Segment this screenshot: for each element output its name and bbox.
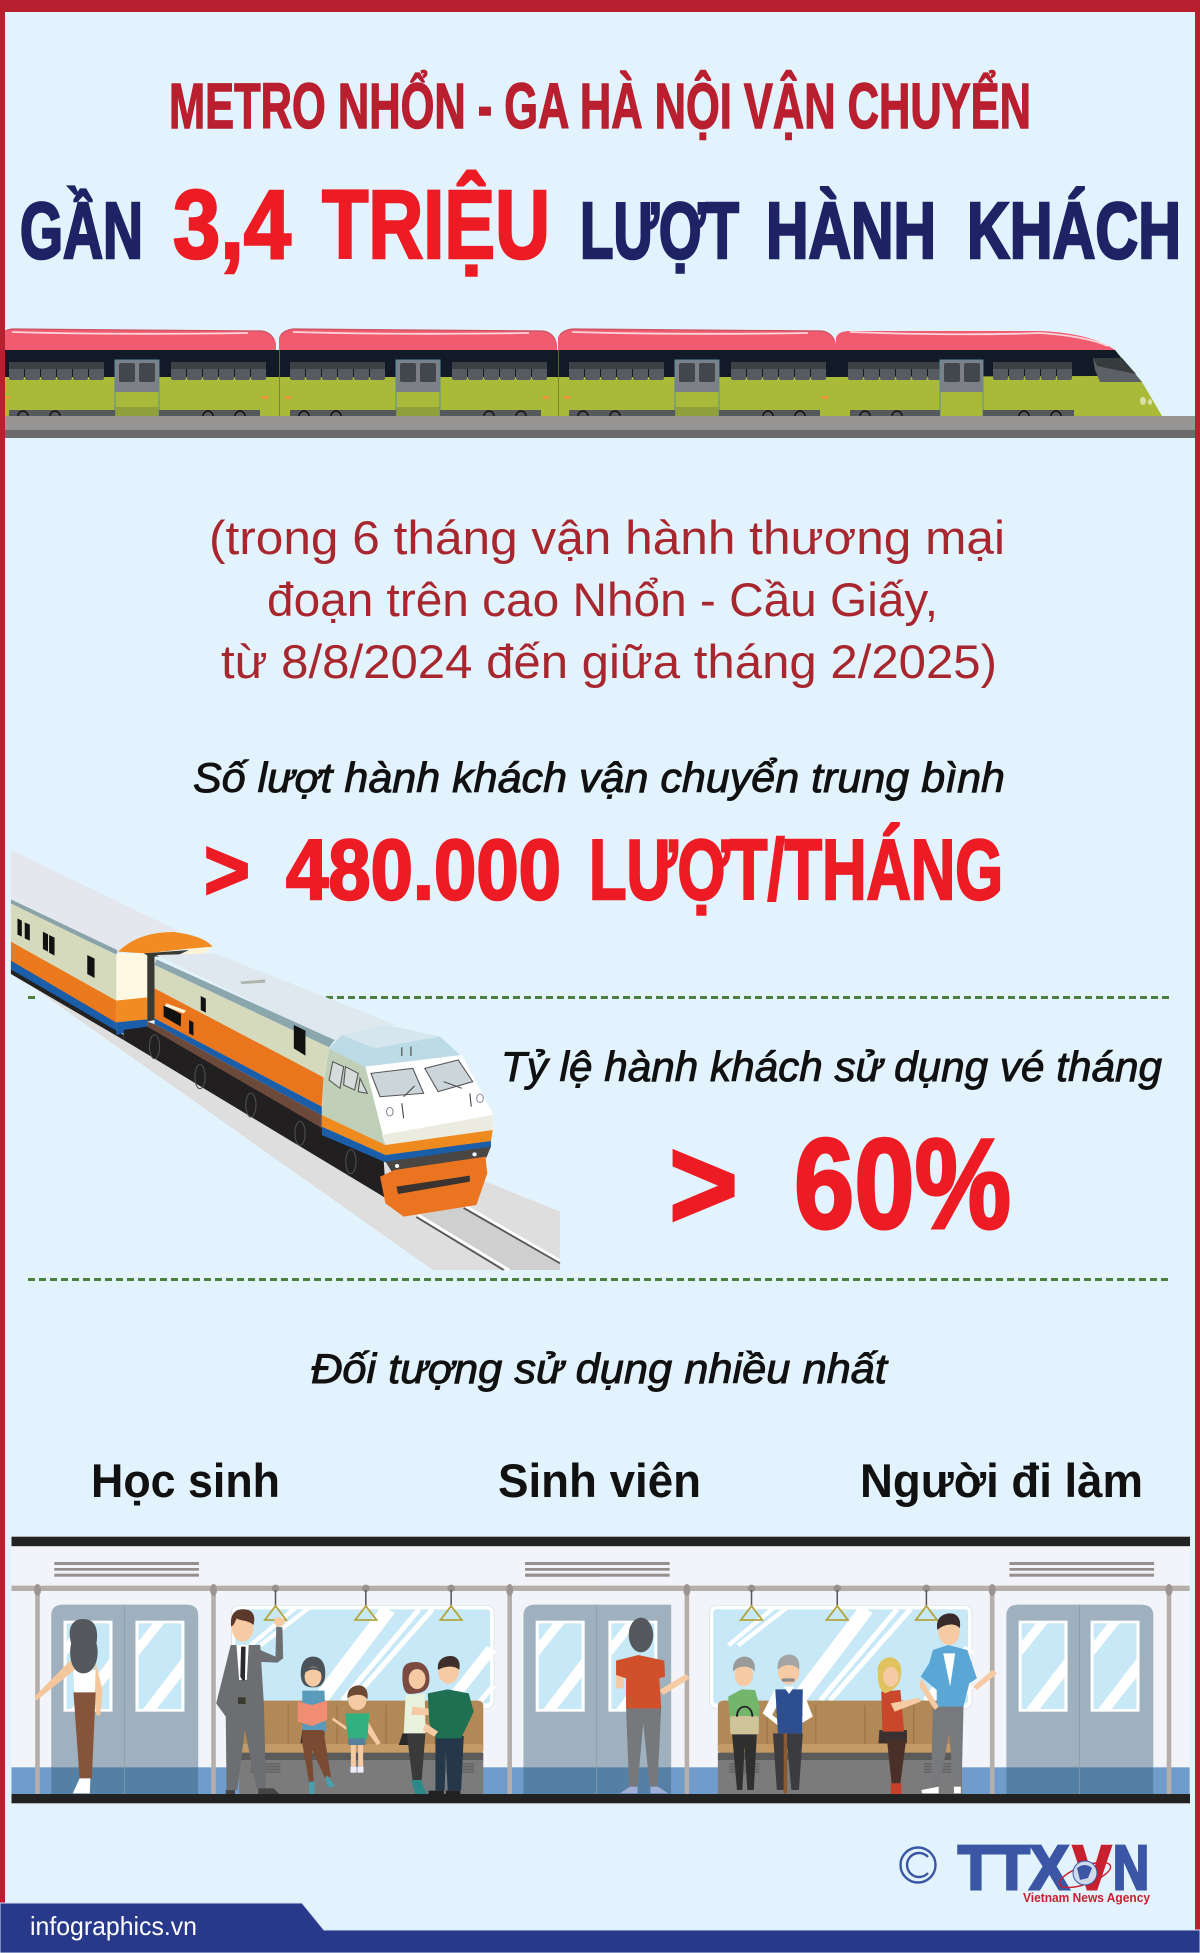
stat: 480.000 per month: 480.000	[286, 823, 561, 918]
TTXVN logo: TTX	[958, 1834, 1069, 1903]
stat: 480.000 per month	[204, 823, 1003, 918]
stat: 60 percent: 60%	[794, 1113, 1011, 1256]
TTXVN logo: V	[1073, 1834, 1111, 1903]
footer band	[0, 1903, 1200, 1953]
cab	[322, 1025, 493, 1217]
grandmother	[728, 1657, 760, 1790]
user group labels: Người đi làm	[860, 1454, 1143, 1507]
interior top and bottom bars	[12, 1537, 1190, 1803]
title line 2: 3,4	[173, 170, 291, 279]
man from behind	[616, 1618, 690, 1793]
child	[332, 1685, 381, 1773]
monthly ticket label: Tỷ lệ hành khách sử dụng vé tháng	[501, 1043, 1162, 1090]
TTXVN logo: Vietnam News Agency	[1023, 1890, 1151, 1905]
subtitle: đoạn trên cao Nhổn - Cầu Giấy,	[267, 573, 938, 626]
stat: 480.000 per month: LƯỢT/THÁNG	[589, 823, 1003, 918]
locomotive illustration	[11, 850, 560, 1270]
platform	[5, 416, 1195, 438]
user group labels: Học sinh	[91, 1454, 280, 1507]
subtitle: từ 8/8/2024 đến giữa tháng 2/2025)	[221, 635, 997, 688]
seated couple	[399, 1656, 474, 1794]
woman reading	[298, 1657, 335, 1794]
title line 2: HÀNH	[766, 186, 936, 275]
rear carriage	[11, 850, 213, 1040]
metro train illustration	[0, 329, 1195, 438]
TTXVN logo: N	[1113, 1834, 1149, 1903]
woman from behind	[34, 1619, 103, 1793]
copyright mark	[900, 1848, 936, 1882]
train interior illustration: left half	[11, 1537, 670, 1803]
user group labels	[91, 1454, 1143, 1507]
title line 2: LƯỢT	[580, 186, 739, 275]
blonde woman	[878, 1657, 921, 1794]
stat: 60 percent: >	[669, 1113, 738, 1256]
ground and rails	[11, 972, 560, 1270]
dotted divider 2	[28, 1278, 1172, 1281]
title line 2	[20, 170, 1181, 279]
locomotive body	[124, 953, 396, 1198]
average passengers label: Số lượt hành khách vận chuyển trung bình	[193, 754, 1005, 801]
stat: 60 percent	[669, 1113, 1011, 1256]
subtitle	[209, 511, 1005, 688]
man in suit	[216, 1609, 285, 1794]
standing man in blue jacket	[920, 1613, 997, 1793]
stat: 480.000 per month: >	[204, 823, 250, 918]
train interior illustration: right half	[525, 1537, 1190, 1803]
user group labels: Sinh viên	[498, 1454, 701, 1507]
title line 2: GẦN	[20, 186, 143, 275]
title line 2: TRIỆU	[322, 170, 550, 279]
front car	[836, 331, 1162, 421]
grandfather	[763, 1655, 813, 1793]
users heading: Đối tượng sử dụng nhiều nhất	[311, 1345, 889, 1392]
dotted divider 1	[28, 996, 1172, 999]
TTXVN logo	[958, 1834, 1151, 1905]
subtitle: (trong 6 tháng vận hành thương mại	[209, 511, 1005, 564]
footer source text: infographics.vn	[30, 1911, 197, 1941]
